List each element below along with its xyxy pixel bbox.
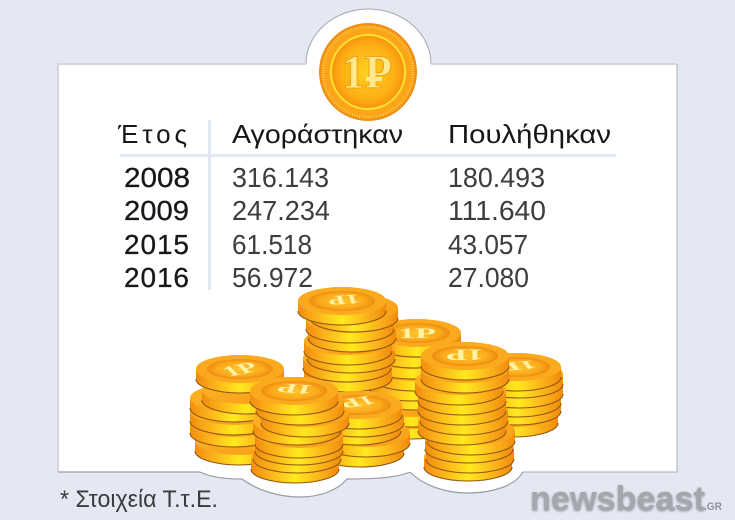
white panel <box>58 9 677 497</box>
coin stack: left: 1P <box>218 359 264 380</box>
sold column: 180.493 <box>448 162 545 193</box>
logo: newsbeast.gr: .GR <box>704 501 722 513</box>
coin stack: back centre-right <box>368 319 461 439</box>
coin stack: front right <box>415 342 515 481</box>
coin stack: tall centre: 1P <box>326 292 362 308</box>
table header: Αγοράστηκαν <box>232 119 403 149</box>
bought column: 56.972 <box>232 262 313 293</box>
coin stack: back right <box>470 353 563 437</box>
logo: newsbeast.gr: newsbeast <box>530 480 705 518</box>
coin stack: front left: 1P <box>275 380 315 396</box>
table header: Πουλήθηκαν <box>448 119 611 149</box>
coin stack: front left <box>250 377 349 483</box>
sold column <box>448 162 546 293</box>
logo: newsbeast.gr: newsbeast <box>530 481 705 519</box>
coin stack: front right: 1P <box>446 346 484 363</box>
table grid lines <box>120 120 616 290</box>
year column: 2008 <box>124 162 190 193</box>
year column <box>124 162 190 293</box>
icon: top 1 ruble coin: 1P <box>342 46 392 99</box>
sold column: 43.057 <box>448 229 528 260</box>
sold column: 27.080 <box>448 262 529 293</box>
footnote: * Στοιχεία Τ.τ.Ε. <box>60 486 218 513</box>
bought column: 247.234 <box>232 195 330 226</box>
table header: Έτος <box>117 119 187 149</box>
year column: 2009 <box>124 195 189 226</box>
coin stack: tall centre <box>298 287 398 392</box>
table header <box>117 119 611 149</box>
coin stack: left <box>190 355 290 465</box>
year column: 2015 <box>124 229 189 260</box>
coin stack: back right: 1P <box>495 358 541 374</box>
year column: 2016 <box>124 262 189 293</box>
coin stack: centre front <box>313 391 410 467</box>
sold column: 111.640 <box>448 195 546 226</box>
bought column <box>232 162 330 293</box>
icon: top 1 ruble coin <box>319 23 417 121</box>
coin stack: back centre-right: 1P <box>398 325 436 341</box>
bought column: 61.518 <box>232 229 312 260</box>
bought column: 316.143 <box>232 162 329 193</box>
coin stack: centre front: 1P <box>335 392 379 410</box>
